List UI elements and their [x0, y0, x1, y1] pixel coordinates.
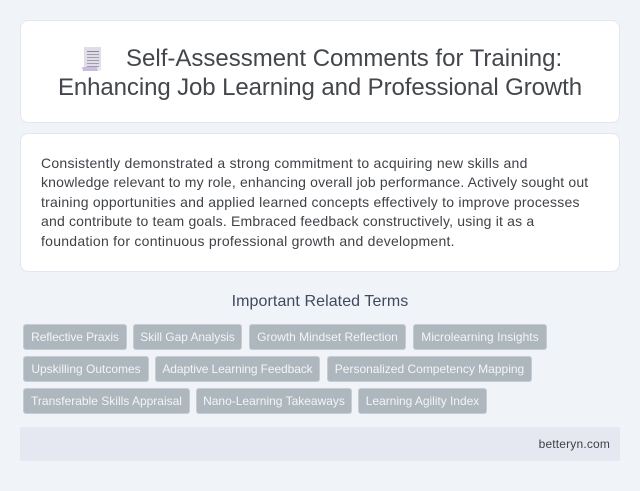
- panel: summary text: [20, 133, 620, 272]
- title: [58, 45, 582, 101]
- tag: Nano-Learning Takeaways: [203, 394, 345, 408]
- paragraph: and contribute to team goals. Embraced feedback constructively, using it as a: [41, 213, 534, 229]
- paragraph: foundation for continuous professional growth and development.: [41, 233, 455, 249]
- tag: [249, 324, 406, 350]
- tag: Transferable Skills Appraisal: [31, 394, 182, 408]
- tag: [155, 356, 320, 382]
- related terms tags: [23, 324, 547, 414]
- tag: Reflective Praxis: [31, 330, 119, 344]
- tag: Learning Agility Index: [366, 394, 479, 408]
- tag: [23, 388, 190, 414]
- tag: [23, 324, 127, 350]
- tag: Microlearning Insights: [421, 330, 539, 344]
- paragraph: training opportunities and applied learned concepts effectively to improve processes: [41, 194, 580, 210]
- tag: Growth Mindset Reflection: [257, 330, 398, 344]
- tag: Upskilling Outcomes: [31, 362, 141, 376]
- icon: scroll document: [82, 47, 102, 71]
- footer source: betteryn.com: [539, 437, 610, 451]
- tag: [413, 324, 547, 350]
- footer bar: [20, 427, 620, 461]
- title: Self-Assessment Comments for Training:: [126, 45, 562, 72]
- tag: [133, 324, 242, 350]
- heading: related terms: Important Related Terms: [232, 293, 408, 310]
- tag: [327, 356, 532, 382]
- panel: title card: [20, 20, 620, 123]
- paragraph: knowledge relevant to my role, enhancing overall job performance. Actively sought out: [41, 174, 588, 190]
- paragraph: [41, 155, 588, 249]
- paragraph: Consistently demonstrated a strong commitment to acquiring new skills and: [41, 155, 528, 171]
- title: Enhancing Job Learning and Professional Growth: [58, 74, 582, 101]
- tag: Personalized Competency Mapping: [335, 362, 524, 376]
- tag: Adaptive Learning Feedback: [162, 362, 313, 376]
- tag: [23, 356, 149, 382]
- tag: [196, 388, 352, 414]
- tag: [358, 388, 487, 414]
- tag: Skill Gap Analysis: [140, 330, 235, 344]
